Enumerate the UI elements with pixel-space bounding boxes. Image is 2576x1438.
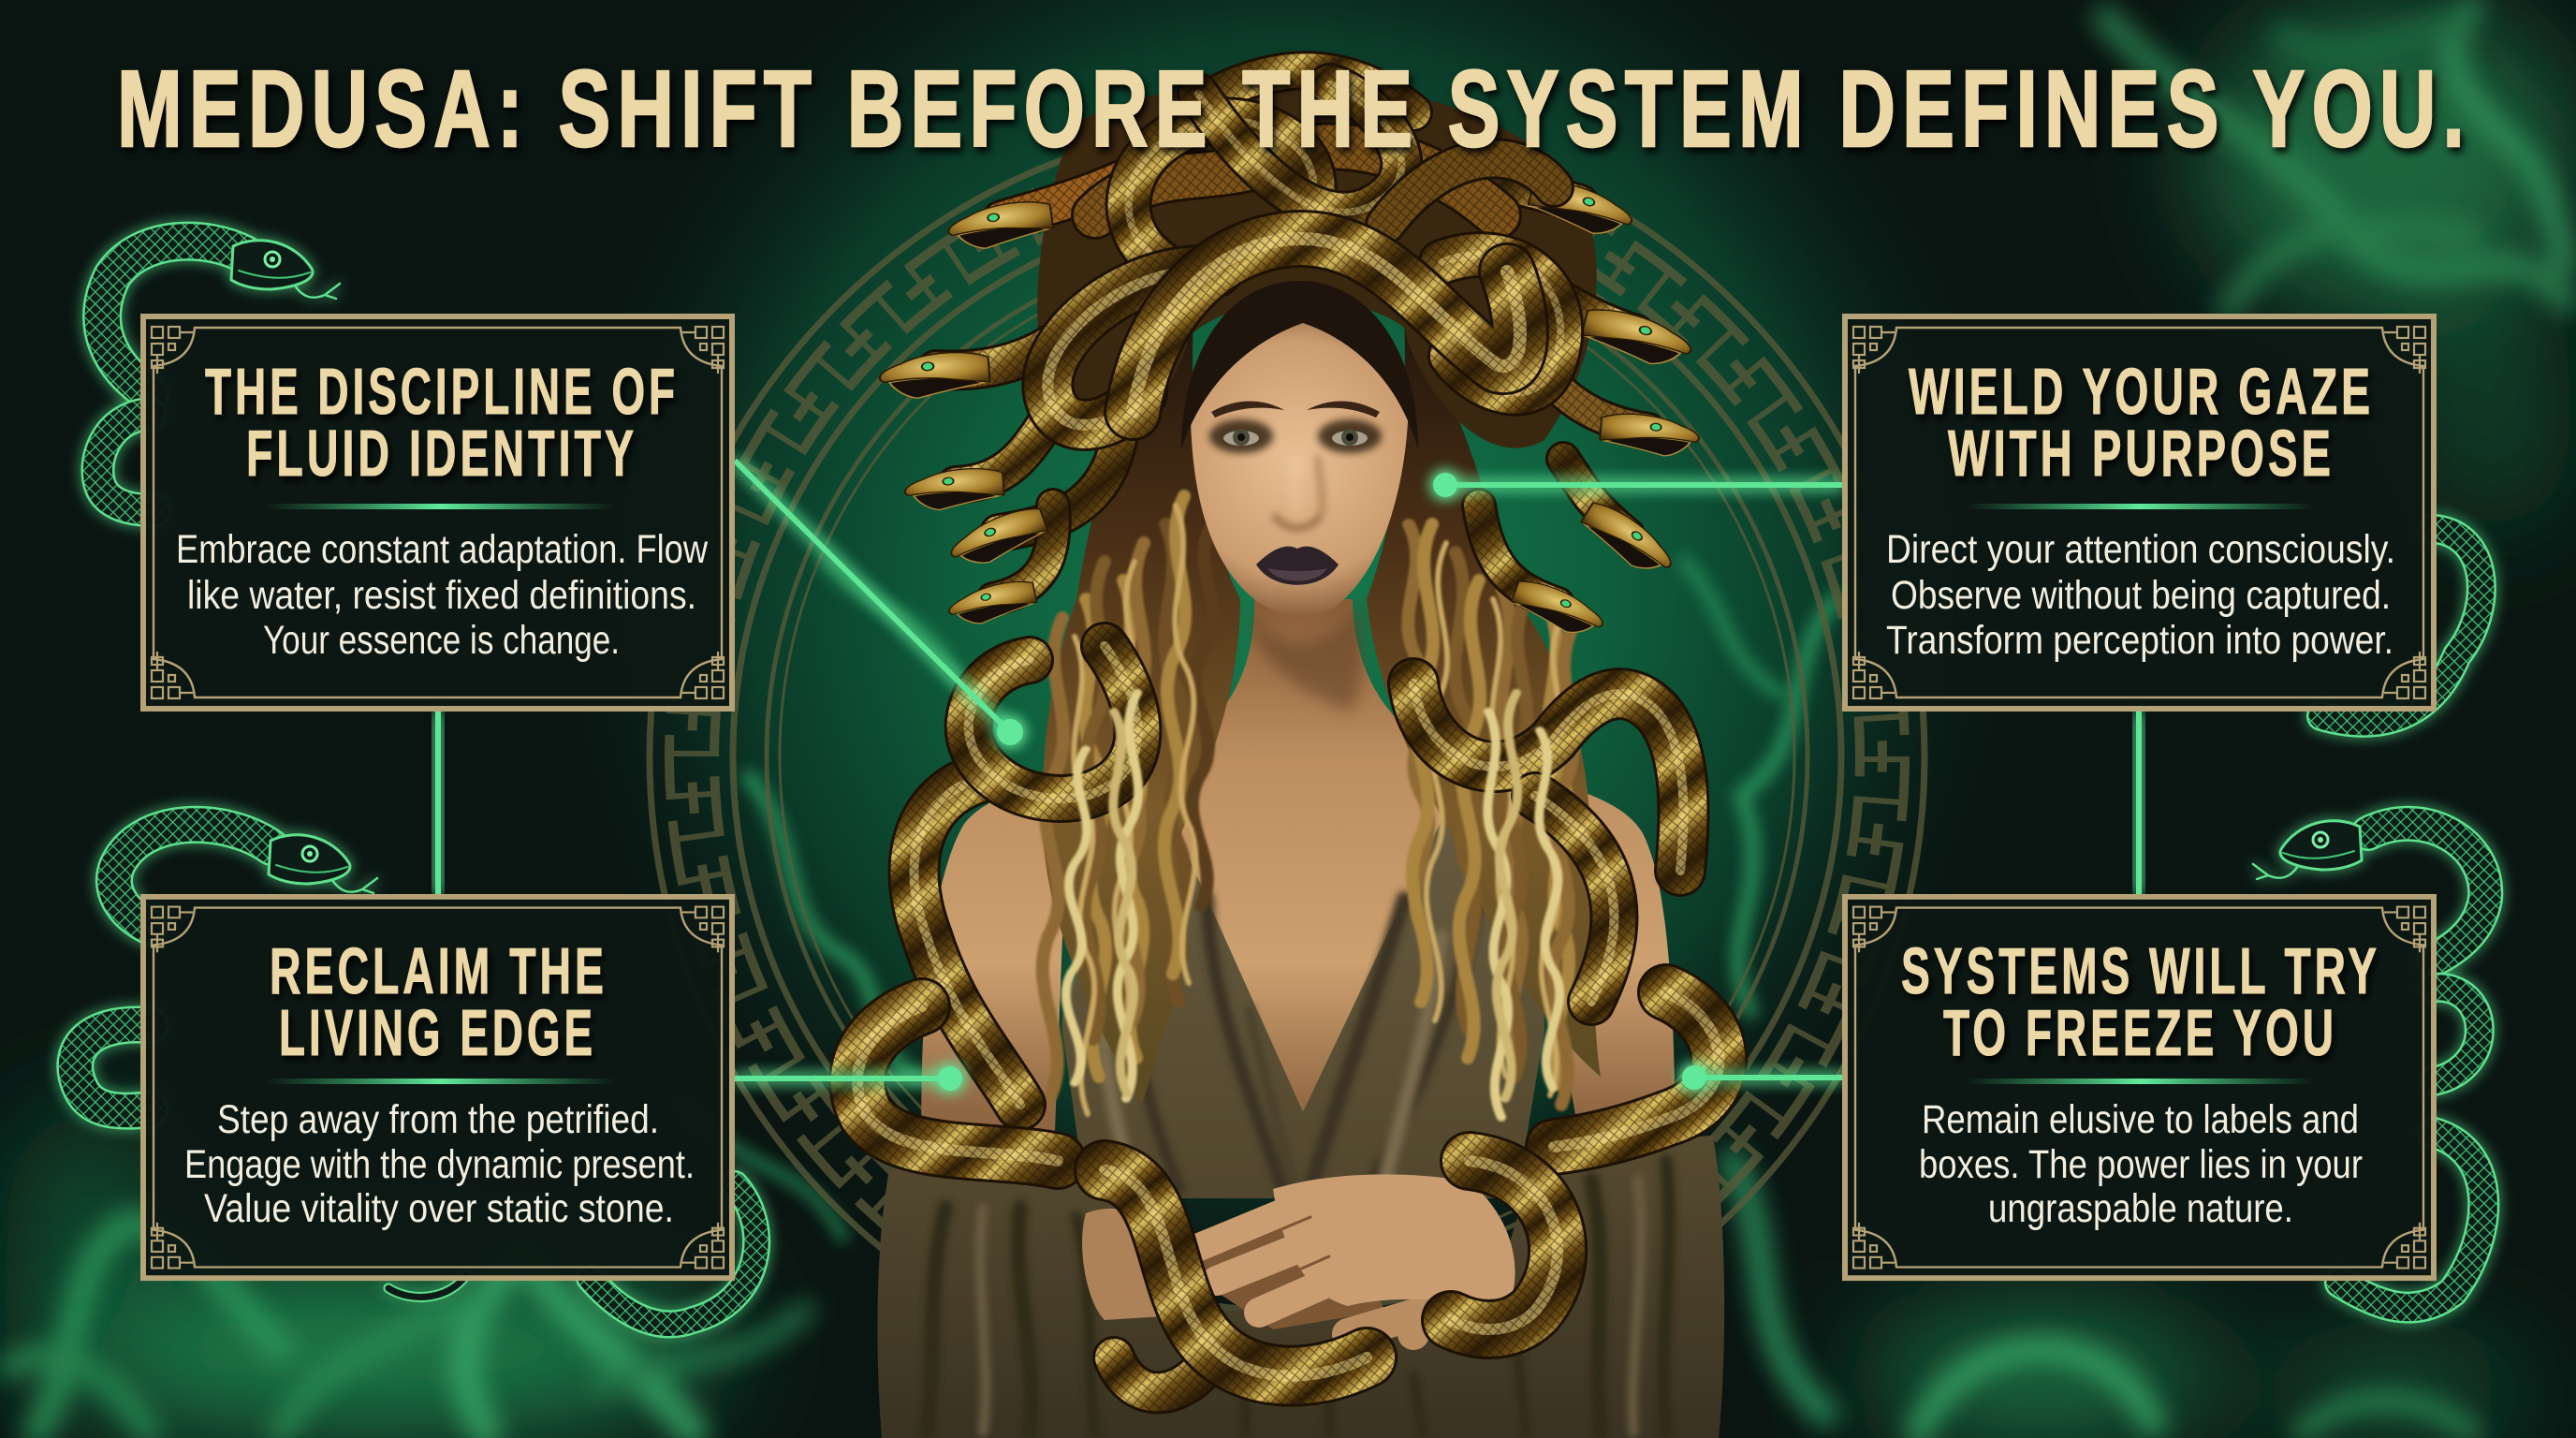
main crown snakes xyxy=(1047,70,1560,425)
face xyxy=(1181,281,1418,616)
dark hair parting xyxy=(1181,281,1418,449)
connector: lower left panel to dot xyxy=(735,1066,962,1091)
connector: top left panel to dot xyxy=(735,461,1023,745)
heading: WITH PURPOSE xyxy=(1948,417,2334,490)
hair strands: back layer xyxy=(1043,496,1573,1105)
body text xyxy=(1886,527,2395,663)
hands xyxy=(1082,1174,1515,1334)
green ghost snake: lower left xyxy=(75,825,756,1324)
nose xyxy=(1275,459,1323,528)
back of upper hand xyxy=(1273,1174,1515,1306)
body text: like water, resist fixed definitions. xyxy=(187,573,696,618)
snake: left forearm loop xyxy=(857,1006,1058,1161)
body text: Direct your attention consciously. xyxy=(1886,527,2395,572)
smoke: top right xyxy=(2106,5,2574,534)
hair snakes: heads xyxy=(878,175,1701,642)
divider xyxy=(266,1078,615,1084)
snake: right forearm loop xyxy=(1554,992,1719,1147)
hair mass xyxy=(1043,318,1601,1105)
green ghost snake: lower right xyxy=(2253,821,2485,1308)
body text: boxes. The power lies in your xyxy=(1919,1142,2363,1187)
eyes xyxy=(1209,401,1382,453)
heading xyxy=(1909,355,2374,490)
panel: Wield Your Gaze with Purpose xyxy=(1845,316,2434,709)
body text: Embrace constant adaptation. Flow xyxy=(176,527,709,572)
hair snakes: crown mass xyxy=(1037,81,1597,448)
snake: left shoulder coil xyxy=(969,646,1137,799)
connector: top right panel to dot xyxy=(1433,473,1843,497)
greek key meander ring xyxy=(650,119,1925,1394)
panel: The Discipline of Fluid Identity xyxy=(143,316,732,709)
divider xyxy=(266,504,615,509)
smoke: inside ring wisps xyxy=(683,562,1835,1236)
fingernail xyxy=(1140,1253,1163,1279)
heading: TO FREEZE YOU xyxy=(1943,996,2337,1069)
lips xyxy=(1256,547,1339,585)
panel: Systems Will Try to Freeze You xyxy=(1845,897,2434,1278)
body text xyxy=(176,527,709,663)
hair highlights xyxy=(1074,506,1562,1114)
snake: lower tail xyxy=(1114,1357,1212,1393)
under-hand shadow xyxy=(1161,1184,1385,1329)
body text: Observe without being captured. xyxy=(1891,573,2391,618)
heading: FLUID IDENTITY xyxy=(246,417,637,490)
snakes coiled on body xyxy=(857,646,1719,1393)
body text: Step away from the petrified. xyxy=(217,1097,659,1142)
connector: right vertical xyxy=(2136,712,2142,894)
connector: left vertical xyxy=(435,712,441,894)
robe: lower drape and sleeves xyxy=(877,1136,1724,1438)
body text: Your essence is change. xyxy=(263,618,620,663)
body text xyxy=(1919,1097,2363,1231)
snake: left arm strand xyxy=(914,777,1020,1105)
snake: right arm strand xyxy=(1535,796,1614,1002)
snake: right shoulder xyxy=(1413,683,1684,871)
body text: Transform perception into power. xyxy=(1886,618,2393,663)
heading: LIVING EDGE xyxy=(279,996,596,1069)
arms and shoulders xyxy=(921,599,1676,1180)
robe: torso xyxy=(1062,814,1544,1198)
body text xyxy=(184,1097,695,1231)
heading: RECLAIM THE xyxy=(270,934,607,1007)
body text: ungraspable nature. xyxy=(1988,1186,2293,1231)
upper hand fingers xyxy=(1161,1198,1348,1313)
hair strands: front layer xyxy=(1066,693,1559,1118)
green ghost snake: top left xyxy=(97,241,340,510)
robe folds xyxy=(927,899,1669,1432)
snake coils around wrists xyxy=(1105,1161,1558,1376)
heading xyxy=(205,355,679,490)
body text: Value vitality over static stone. xyxy=(204,1186,674,1231)
heading: THE DISCIPLINE OF xyxy=(205,355,679,428)
left forearm xyxy=(1082,1209,1179,1320)
heading xyxy=(270,934,607,1069)
panel: Reclaim the Living Edge xyxy=(143,897,732,1278)
body text: Remain elusive to labels and xyxy=(1922,1097,2359,1142)
divider xyxy=(1966,1078,2315,1084)
finger creases xyxy=(1181,1217,1329,1298)
heading xyxy=(1901,934,2380,1069)
hair snakes: bodies xyxy=(936,159,1648,604)
lower hand fingers xyxy=(1348,1283,1460,1334)
connector: lower right panel to dot xyxy=(1682,1065,1843,1090)
neck shadow xyxy=(1245,599,1363,712)
central figure: Medusa xyxy=(857,70,1724,1438)
body text: Engage with the dynamic present. xyxy=(184,1142,695,1187)
divider xyxy=(1966,504,2315,509)
green ghost snake: top right xyxy=(2321,529,2481,723)
smoke: bottom left xyxy=(5,1105,805,1437)
smoke: bottom right xyxy=(1732,1161,2527,1436)
